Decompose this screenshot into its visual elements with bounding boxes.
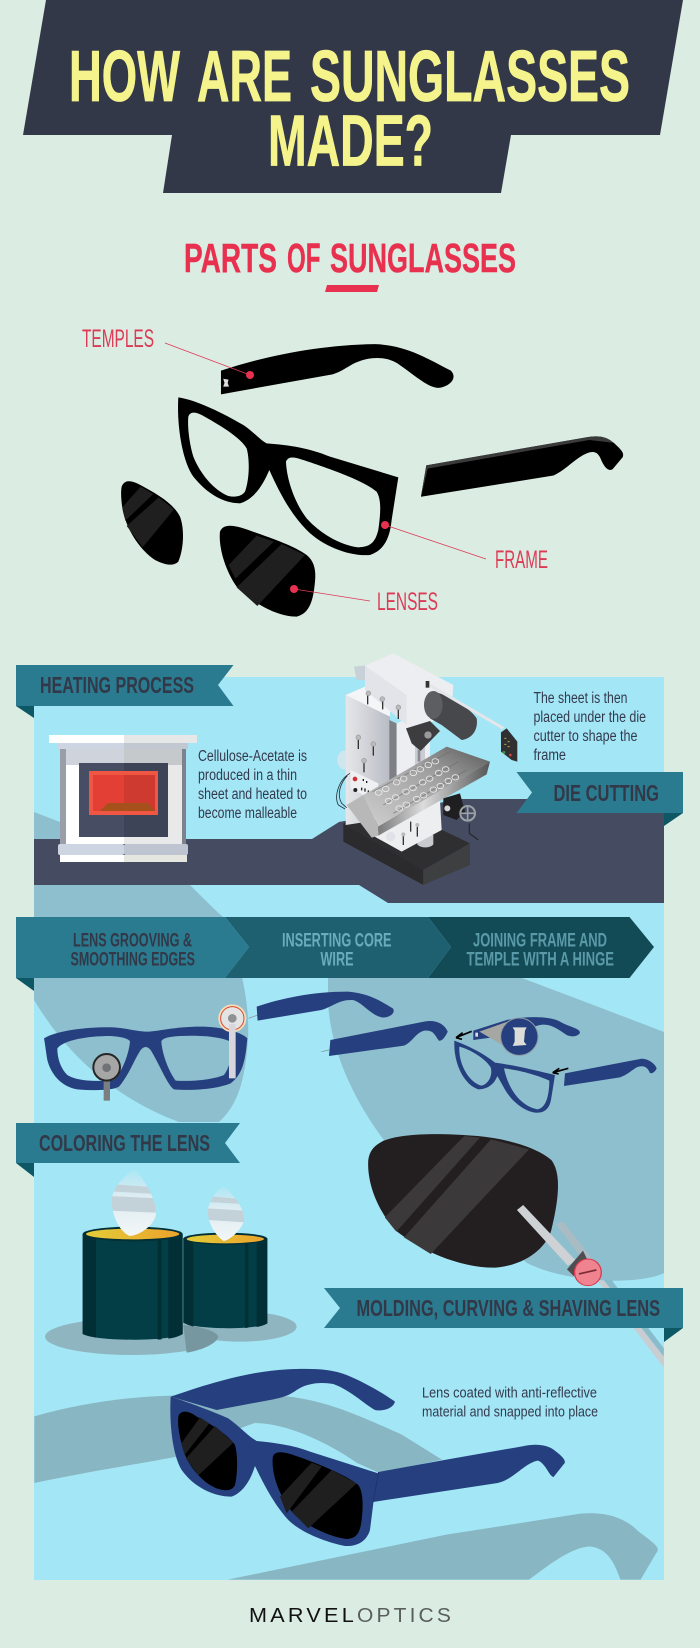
ribbon: molding bbox=[324, 1288, 683, 1342]
ribbon: coloring the lens: COLORING THE LENS bbox=[39, 1130, 210, 1156]
front frame bbox=[170, 1397, 378, 1546]
column bbox=[337, 695, 430, 825]
logo: marvel optics: MARVEL bbox=[249, 1605, 357, 1627]
chevron 1: lens grooving bbox=[16, 917, 249, 978]
large vat bbox=[83, 1227, 183, 1340]
ribbon: coloring the lens bbox=[16, 1123, 240, 1177]
text: heating: sheet and heated to bbox=[198, 786, 307, 803]
text: final coating bbox=[422, 1386, 598, 1420]
motor bbox=[406, 691, 477, 762]
tool shadow bbox=[556, 1222, 604, 1277]
dye vats bbox=[45, 1168, 297, 1355]
text: die cutting bbox=[534, 690, 646, 764]
steam large bbox=[110, 1168, 157, 1236]
work table bbox=[347, 747, 490, 838]
blue frame grooving bbox=[44, 1004, 247, 1101]
small temple upper bbox=[473, 1017, 580, 1040]
logo: marvel optics: OPTICS bbox=[357, 1605, 454, 1627]
control panel and wires bbox=[337, 770, 378, 809]
text: final coating: material and snapped into place bbox=[422, 1404, 598, 1420]
chevron 2: core wire bbox=[225, 917, 451, 978]
lens stripes bbox=[385, 1136, 480, 1232]
title: MADE? bbox=[268, 102, 433, 182]
chevron 3: joining frame bbox=[428, 917, 654, 978]
lens shaving bbox=[368, 1134, 664, 1368]
final sunglasses bbox=[170, 1369, 395, 1546]
magnifier bbox=[479, 1018, 538, 1055]
lens right bbox=[220, 526, 315, 617]
handwheel bbox=[443, 793, 478, 840]
head bbox=[346, 653, 453, 725]
arrows bbox=[456, 1031, 568, 1074]
shadow shapes bbox=[34, 812, 664, 1281]
title banner bbox=[23, 0, 683, 193]
heading: parts of sunglasses: SUNGLASSES bbox=[330, 235, 516, 281]
blue temples with core wire bbox=[249, 992, 448, 1056]
ribbon: heating process bbox=[16, 665, 234, 718]
back temple bbox=[171, 1369, 395, 1410]
small vat bbox=[183, 1233, 267, 1328]
shaving tool bbox=[517, 1205, 664, 1368]
shadow bands behind final sunglasses bbox=[34, 1396, 658, 1580]
text: heating bbox=[198, 748, 307, 822]
text: heating: produced in a thin bbox=[198, 767, 297, 784]
chevron 3: joining frame: JOINING FRAME AND bbox=[473, 930, 607, 952]
callout: frame: FRAME bbox=[495, 546, 548, 574]
small frame bbox=[454, 1041, 555, 1113]
text: die cutting: placed under the die bbox=[534, 709, 646, 726]
chevron 1: lens grooving: SMOOTHING EDGES bbox=[70, 950, 195, 970]
lens left bbox=[121, 481, 183, 565]
callout: lenses: LENSES bbox=[377, 588, 438, 616]
callout: temples bbox=[82, 325, 254, 379]
chevron 3: joining frame: TEMPLE WITH A HINGE bbox=[466, 950, 614, 970]
ribbon: die cutting bbox=[516, 772, 683, 826]
left lens bbox=[178, 1412, 237, 1490]
knobs bbox=[356, 691, 401, 772]
ribbon: heating process: HEATING PROCESS bbox=[40, 672, 194, 698]
steam small bbox=[207, 1185, 245, 1241]
text: heating: Cellulose-Acetate is bbox=[198, 748, 307, 765]
temple top bbox=[221, 344, 454, 394]
small glasses with hinge bbox=[454, 1017, 657, 1113]
base bbox=[343, 802, 470, 885]
text: die cutting: The sheet is then bbox=[534, 690, 628, 707]
arm and pendant bbox=[426, 681, 517, 762]
text: heating: become malleable bbox=[198, 805, 297, 822]
small temple lower bbox=[564, 1059, 657, 1086]
chevron 2: core wire: INSERTING CORE bbox=[282, 930, 392, 952]
parts diagram bbox=[82, 325, 623, 617]
text: final coating: Lens coated with anti-reflective bbox=[422, 1386, 597, 1402]
text: die cutting: frame bbox=[534, 747, 566, 764]
chevron 2: core wire: WIRE bbox=[320, 950, 354, 970]
frames on table bbox=[375, 759, 459, 811]
lens bbox=[368, 1134, 558, 1268]
right lens bbox=[273, 1452, 363, 1539]
dark floor band bbox=[34, 799, 664, 903]
title bbox=[69, 37, 630, 182]
tool right bbox=[218, 1004, 246, 1078]
heading: parts of sunglasses: PARTS bbox=[184, 235, 277, 281]
right temple final bbox=[373, 1445, 565, 1502]
furnace bbox=[49, 735, 197, 862]
callout: temples: TEMPLES bbox=[82, 325, 154, 353]
logo: marvel optics bbox=[249, 1605, 454, 1627]
callout: lenses bbox=[290, 585, 438, 616]
tool left bbox=[93, 1054, 120, 1101]
process panel background bbox=[34, 677, 664, 1580]
die cutting machine bbox=[337, 653, 517, 885]
process chevrons bbox=[16, 917, 654, 991]
title: ARE bbox=[197, 37, 292, 117]
ribbon: die cutting: DIE CUTTING bbox=[554, 780, 659, 806]
temple right bbox=[421, 436, 623, 497]
title: HOW bbox=[69, 37, 180, 117]
lower box bbox=[372, 800, 442, 852]
text: die cutting: cutter to shape the bbox=[534, 728, 638, 745]
heading: parts of sunglasses bbox=[184, 235, 516, 292]
chevron 1: lens grooving: LENS GROOVING & bbox=[73, 930, 192, 952]
heading: parts of sunglasses: OF bbox=[287, 235, 320, 281]
frame bbox=[178, 397, 398, 555]
callout: frame bbox=[381, 521, 548, 574]
